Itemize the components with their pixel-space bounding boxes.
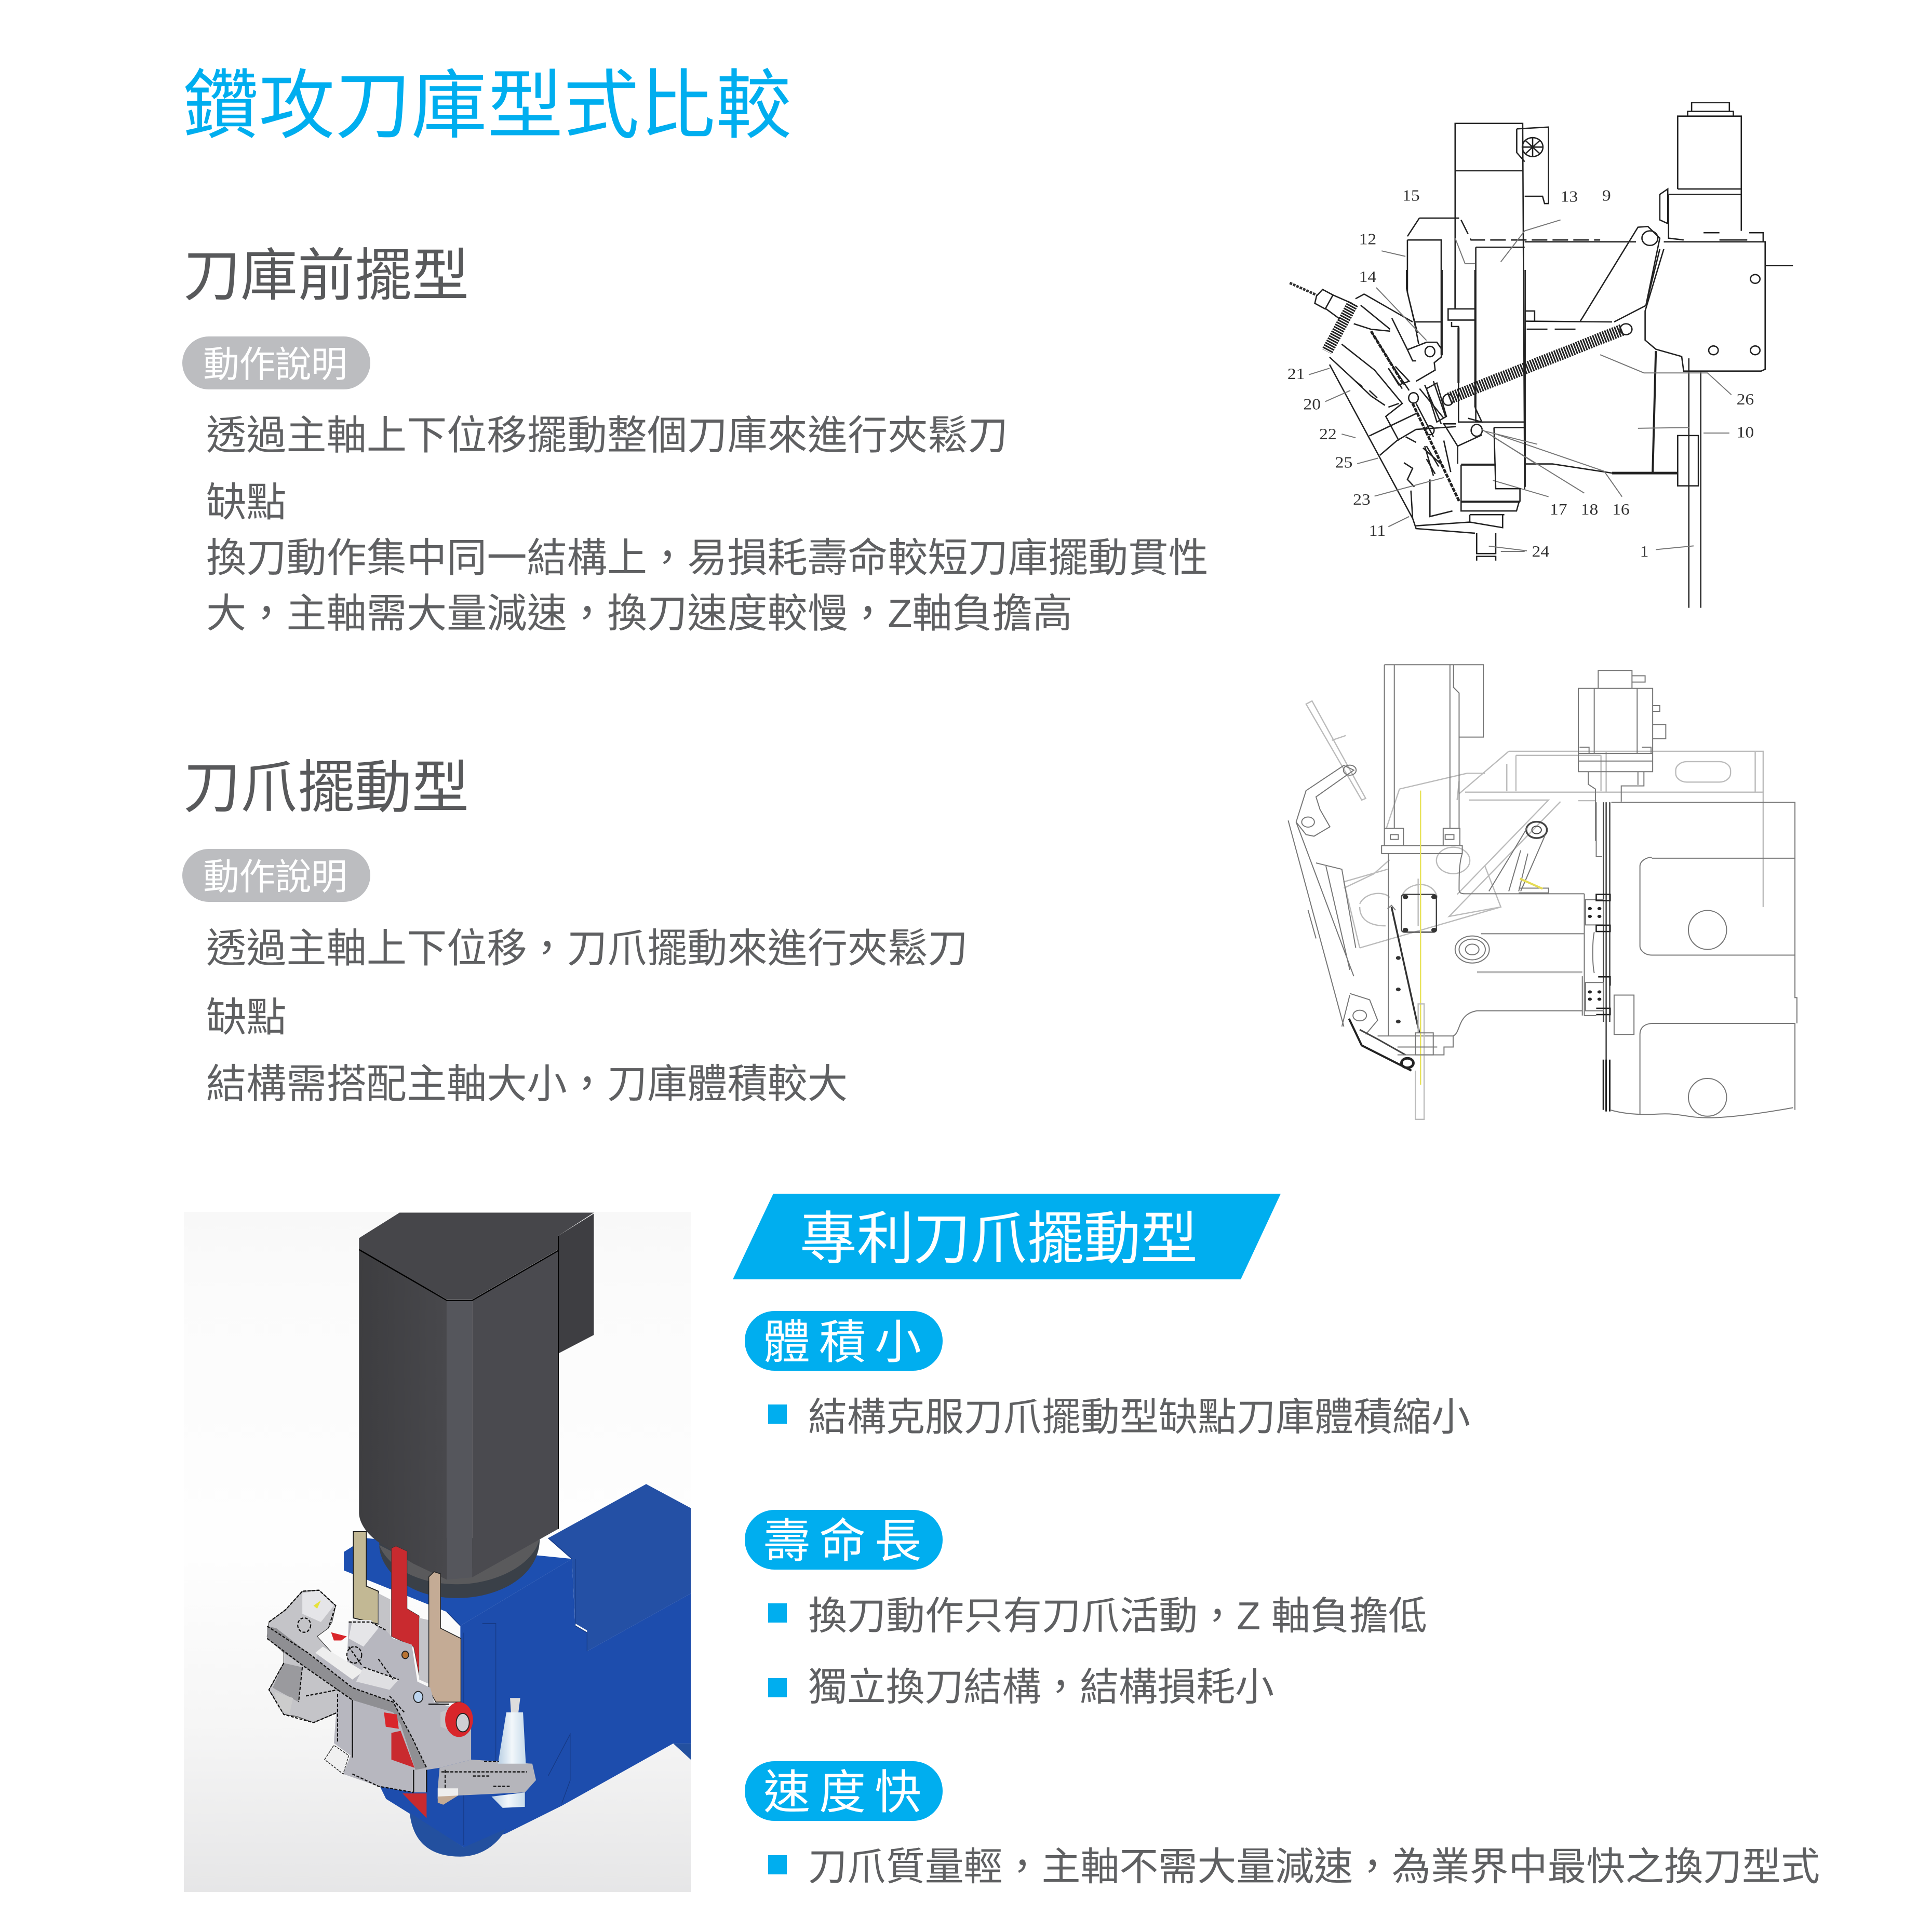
text block: action and drawbacks: 透過主軸上下位移，刀爪擺動來進行夾鬆刀	[206, 926, 968, 971]
diagram: magazine front swing patent drawing: 11	[1369, 521, 1386, 539]
text block: action and drawbacks: 缺點	[206, 480, 286, 525]
pill: action description	[182, 849, 370, 902]
feature: fast speed	[745, 1761, 1820, 1888]
section: gripper swing type	[182, 756, 968, 1106]
feature: small volume	[745, 1311, 1470, 1439]
text block: action and drawbacks: 結構需搭配主軸大小，刀庫體積較大	[206, 1062, 848, 1106]
pill: action description: 動作說明	[203, 857, 347, 897]
diagram: magazine front swing patent drawing: 13	[1561, 187, 1578, 205]
diagram: magazine front swing patent drawing: 26	[1737, 390, 1754, 408]
render: machine model	[344, 1213, 691, 1857]
diagram: magazine front swing patent drawing: 15	[1402, 186, 1420, 204]
panel: 3D render of patented gripper swing	[184, 1212, 691, 1892]
text block: action and drawbacks	[206, 926, 968, 1106]
pill: small volume: 體積小	[763, 1317, 921, 1369]
render: tool gripper assembly	[267, 1532, 536, 1818]
diagram: magazine front swing patent drawing: 24	[1532, 542, 1549, 560]
diagram: magazine front swing patent drawing: 18	[1581, 500, 1598, 518]
pill: long life: 壽命長	[763, 1516, 921, 1568]
bullet item: 獨立換刀結構，結構損耗小	[808, 1665, 1274, 1709]
text block: action and drawbacks	[206, 413, 1209, 636]
pill: fast speed	[745, 1761, 943, 1821]
bullet item: 刀爪質量輕，主軸不需大量減速，為業界中最快之換刀型式	[808, 1845, 1820, 1888]
heading: magazine front swing: 刀庫前擺型	[183, 244, 469, 308]
diagram: magazine front swing patent drawing: 16	[1612, 500, 1630, 518]
bullet item: 換刀動作只有刀爪活動，Z 軸負擔低	[808, 1594, 1427, 1638]
diagram: magazine front swing patent drawing: 10	[1737, 423, 1754, 441]
banner: patented gripper swing type: 專利刀爪擺動型	[800, 1207, 1198, 1271]
banner: patented gripper swing type	[733, 1194, 1281, 1279]
pill: long life	[745, 1510, 943, 1570]
diagram: magazine front swing patent drawing: 23	[1353, 490, 1371, 508]
render background	[184, 1212, 691, 1892]
pill: small volume	[745, 1311, 943, 1371]
diagram: magazine front swing patent drawing: 1	[1640, 542, 1648, 560]
text block: action and drawbacks: 透過主軸上下位移擺動整個刀庫來進行夾鬆刀	[206, 413, 1008, 458]
pill: fast speed: 速度快	[763, 1767, 921, 1819]
diagram: magazine front swing patent drawing: 22	[1319, 425, 1337, 443]
feature: long life	[745, 1510, 1427, 1709]
diagram: magazine front swing patent drawing: 20	[1303, 395, 1321, 413]
title: 鑽攻刀庫型式比較	[183, 63, 791, 148]
diagram: magazine front swing patent drawing: 17	[1550, 500, 1567, 518]
diagram: gripper swing line drawing	[1288, 665, 1797, 1119]
section: magazine front swing type	[182, 244, 1209, 636]
heading: gripper swing: 刀爪擺動型	[183, 756, 469, 820]
diagram: magazine front swing patent drawing: 25	[1335, 453, 1352, 471]
diagram: magazine front swing patent drawing	[1287, 103, 1793, 608]
text block: action and drawbacks: 換刀動作集中同一結構上，易損耗壽命較短刀庫擺動貫性	[206, 536, 1209, 580]
text block: action and drawbacks: 大，主軸需大量減速，換刀速度較慢，Z軸負擔高	[206, 591, 1072, 636]
diagram: magazine front swing patent drawing: 12	[1359, 230, 1376, 248]
diagram: magazine front swing patent drawing: 9	[1602, 186, 1611, 204]
diagram: magazine front swing patent drawing: 14	[1359, 267, 1376, 286]
pill: action description	[182, 336, 370, 389]
pill: action description: 動作說明	[203, 344, 347, 385]
bullet item: 結構克服刀爪擺動型缺點刀庫體積縮小	[808, 1395, 1470, 1439]
diagram: magazine front swing patent drawing: 21	[1287, 364, 1305, 383]
text block: action and drawbacks: 缺點	[206, 995, 286, 1040]
